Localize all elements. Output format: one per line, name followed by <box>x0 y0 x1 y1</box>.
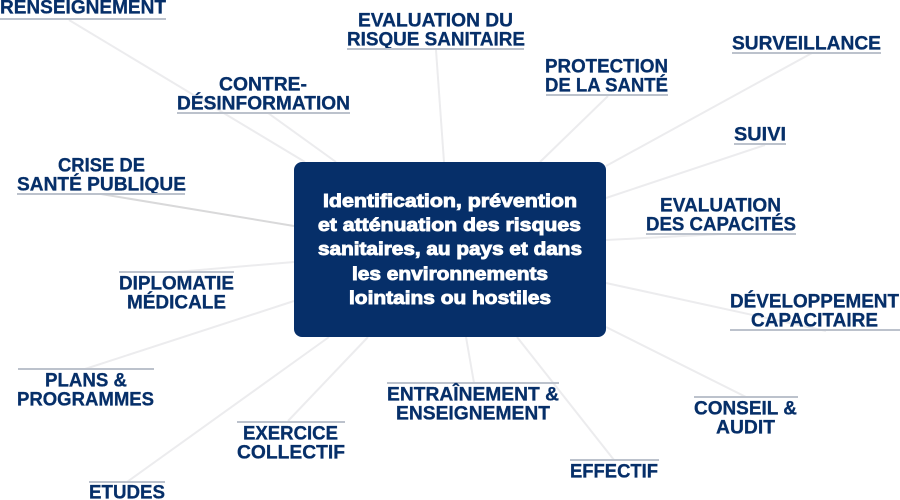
label: protection de la sante: PROTECTION <box>545 56 668 77</box>
label: entrainement et enseignement: ENTRAÎNEMENT & <box>387 383 559 405</box>
label: conseil et audit: CONSEIL & <box>694 398 797 419</box>
label: developpement capacitaire <box>730 290 900 331</box>
label: crise de sante publique <box>17 155 186 195</box>
label: exercice collectif <box>237 421 345 463</box>
label: diplomatie medicale: DIPLOMATIE <box>119 273 234 294</box>
label: diplomatie medicale: MÉDICALE <box>127 291 226 313</box>
label: developpement capacitaire: CAPACITAIRE <box>751 310 878 331</box>
label: suivi: SUIVI <box>734 124 786 145</box>
label: protection de la sante: DE LA SANTÉ <box>545 74 668 96</box>
label: crise de sante publique: CRISE DE <box>58 155 145 176</box>
central box: sanitaires, au pays et dans <box>318 239 582 259</box>
label: surveillance: SURVEILLANCE <box>732 33 881 54</box>
label: evaluation des capacites <box>646 195 796 235</box>
label: conseil et audit: AUDIT <box>716 417 775 438</box>
label: effectif: EFFECTIF <box>570 461 658 482</box>
label: protection de la sante <box>545 56 668 96</box>
label: developpement capacitaire: DÉVELOPPEMENT <box>730 290 899 312</box>
label: exercice collectif: EXERCICE <box>243 423 338 444</box>
label: diplomatie medicale <box>119 271 234 313</box>
label: crise de sante publique: SANTÉ PUBLIQUE <box>17 173 186 195</box>
label: exercice collectif: COLLECTIF <box>237 442 345 463</box>
central box: Identification, prévention <box>323 191 577 211</box>
label: contre-desinformation: CONTRE- <box>219 74 307 95</box>
central box: les environnements <box>352 264 548 284</box>
label: contre-desinformation: DÉSINFORMATION <box>177 92 350 114</box>
label: evaluation du risque sanitaire: EVALUATION DU <box>358 10 513 31</box>
label: evaluation des capacites: EVALUATION <box>660 195 781 216</box>
label: contre-desinformation <box>177 74 350 114</box>
central box: et atténuation des risques <box>318 215 581 235</box>
central box: lointains ou hostiles <box>349 288 551 308</box>
label: plans et programmes: PROGRAMMES <box>17 389 154 410</box>
label: evaluation du risque sanitaire <box>347 10 525 50</box>
label: plans et programmes: PLANS & <box>45 370 127 391</box>
label: evaluation du risque sanitaire: RISQUE SANITAIRE <box>347 29 525 50</box>
central box <box>294 162 606 337</box>
label: entrainement et enseignement <box>387 382 559 424</box>
label: evaluation des capacites: DES CAPACITÉS <box>646 213 796 235</box>
connector lines <box>69 20 826 482</box>
label: conseil et audit <box>694 396 798 438</box>
label: plans et programmes <box>17 368 154 410</box>
label: entrainement et enseignement: ENSEIGNEMENT <box>396 403 550 424</box>
